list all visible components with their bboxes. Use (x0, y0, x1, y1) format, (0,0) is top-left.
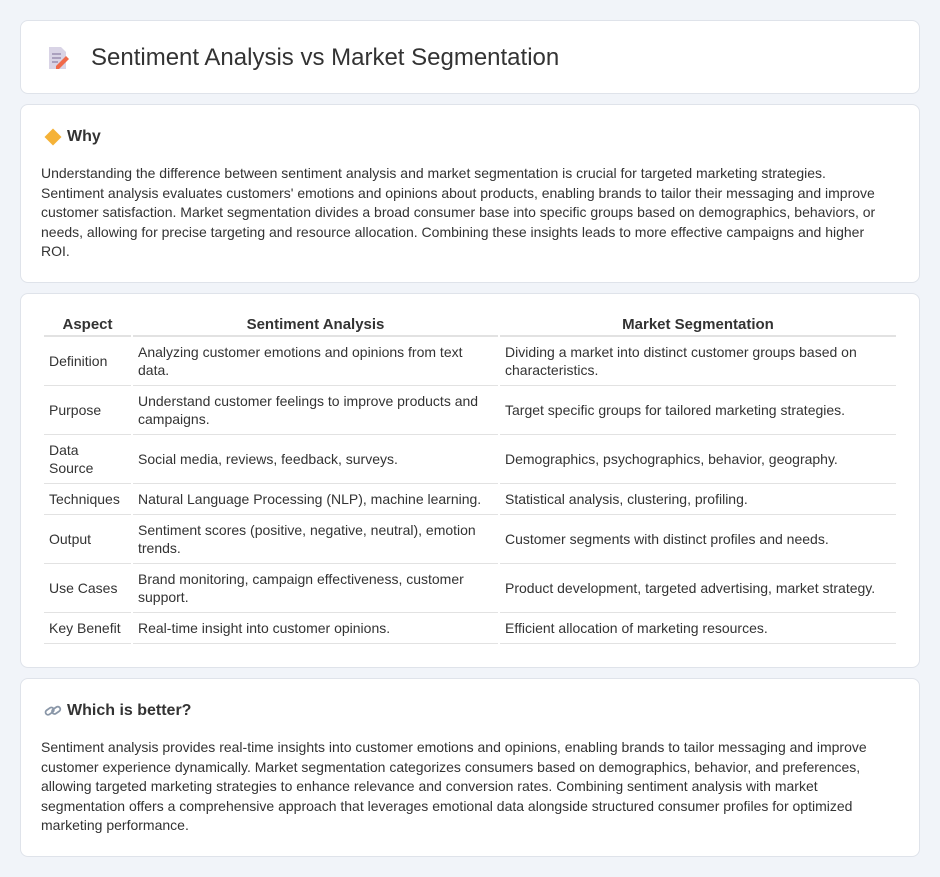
icon: link (44, 706, 62, 716)
panel: why (20, 104, 920, 283)
table (44, 316, 896, 644)
table: Use Cases (49, 580, 117, 596)
title: Sentiment Analysis vs Market Segmentation (91, 44, 559, 71)
table: Natural Language Processing (NLP), machine learning. (138, 491, 481, 507)
table: Data Source (49, 442, 93, 476)
table: Market Segmentation (622, 316, 774, 332)
header card (20, 20, 920, 94)
table: Techniques (49, 491, 120, 507)
table: Sentiment scores (positive, negative, neutral), emotion trends. (138, 522, 476, 556)
table: Purpose (49, 402, 101, 418)
table: Real-time insight into customer opinions. (138, 620, 390, 636)
table: Aspect (62, 316, 113, 332)
table: Key Benefit (49, 620, 121, 636)
panel: which is better (20, 678, 920, 857)
text: why: Understanding the difference between sentiment analysis and market segmentation is crucial for targeted marketing strategies. Sentiment analysis evaluates customers' emotions and opinions about products, enabling brands to tailor their messaging and improve customer satisfaction. Market segmentation divides a broad consumer base into specific groups based on demographics, behaviors, or needs, allowing for precise targeting and resource allocation. Combining these insights leads to more effective campaigns and higher ROI. (41, 165, 875, 259)
icon: diamond (44, 128, 62, 146)
heading: why: Why (67, 128, 101, 145)
table: Statistical analysis, clustering, profiling. (505, 491, 748, 507)
table: Brand monitoring, campaign effectiveness, customer support. (138, 571, 464, 605)
table: Efficient allocation of marketing resources. (505, 620, 768, 636)
heading: which is better: Which is better? (67, 702, 191, 719)
icon: document pencil (49, 47, 69, 69)
table: Product development, targeted advertising, market strategy. (505, 580, 875, 596)
table: Output (49, 531, 91, 547)
text: which is better: Sentiment analysis provides real-time insights into customer emotions and opinions, enabling brands to tailor messaging and improve customer experience dynamically. Market segmentation categorizes consumers based on demographics, behavior, and preferences, allowing targeted marketing strategies to enhance relevance and conversion rates. Combining sentiment analysis with market segmentation offers a comprehensive approach that leverages emotional data alongside structured consumer profiles for optimized marketing performance. (41, 739, 867, 833)
table: Sentiment Analysis (247, 316, 384, 332)
table: Customer segments with distinct profiles and needs. (505, 531, 829, 547)
table: Definition (49, 353, 107, 369)
table: Demographics, psychographics, behavior, geography. (505, 451, 838, 467)
panel: comparison table (20, 293, 920, 668)
table: Social media, reviews, feedback, surveys. (138, 451, 398, 467)
table: Dividing a market into distinct customer groups based on characteristics. (505, 344, 857, 378)
table: Analyzing customer emotions and opinions from text data. (138, 344, 462, 378)
table: Target specific groups for tailored marketing strategies. (505, 402, 845, 418)
table: Understand customer feelings to improve products and campaigns. (138, 393, 478, 427)
